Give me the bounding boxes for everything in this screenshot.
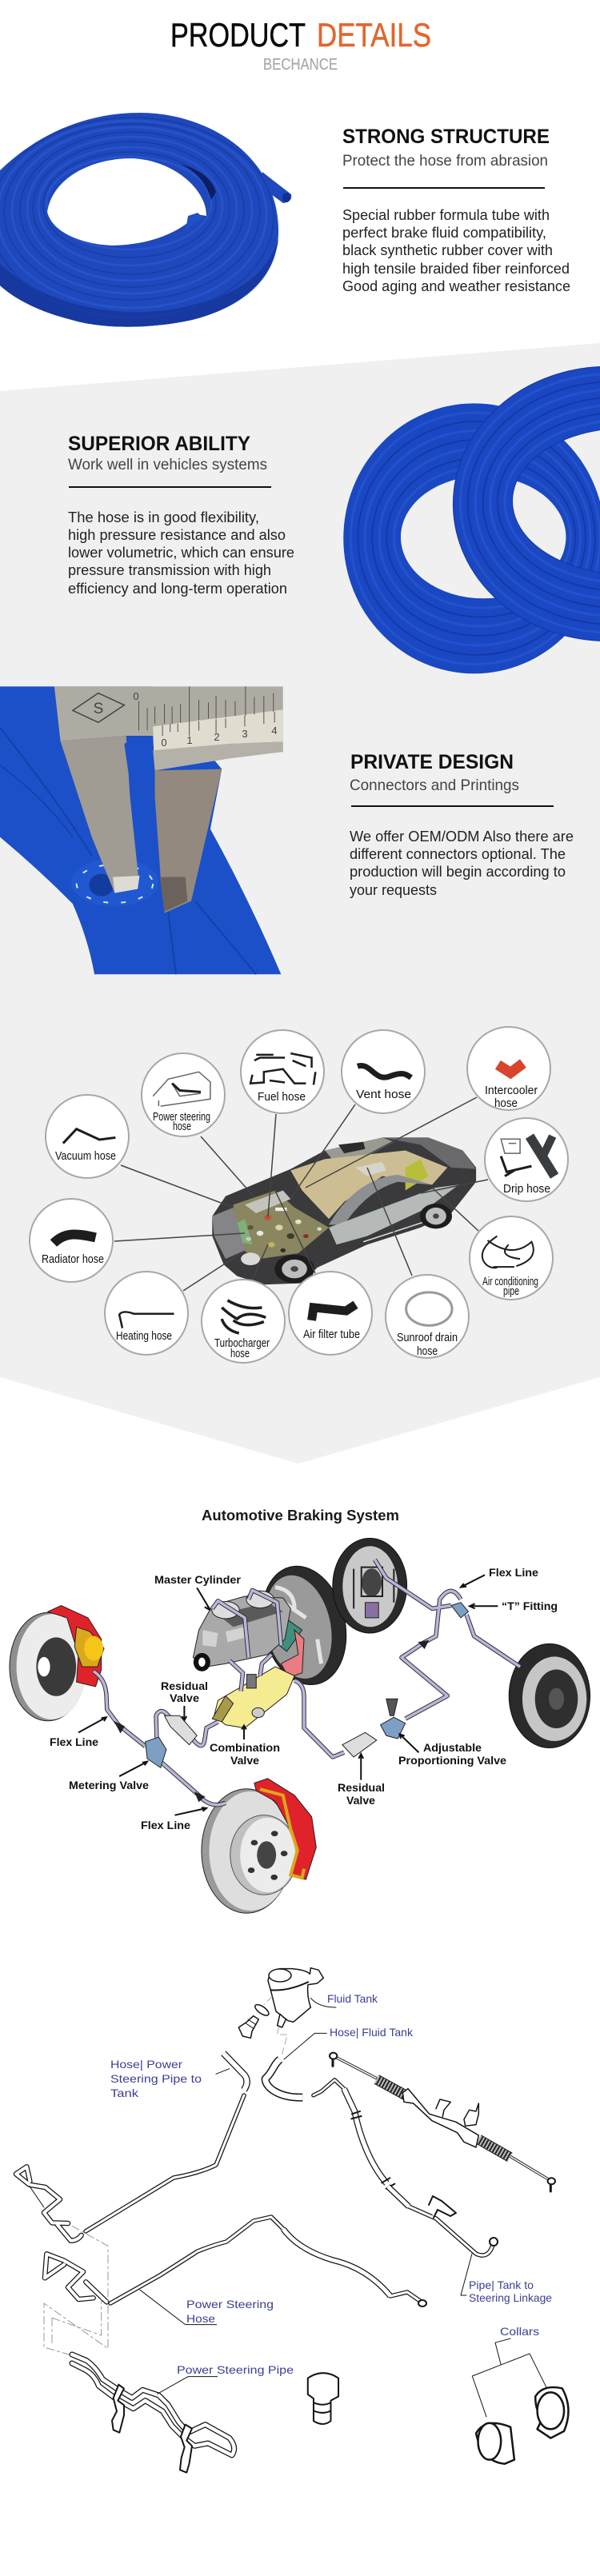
- hose labels: Turbocharger: [214, 1336, 270, 1350]
- hose labels: Vent hose: [356, 1088, 411, 1101]
- brake labels: Residual: [338, 1781, 385, 1794]
- body text: The hose is in good flexibility,: [68, 509, 259, 525]
- upper parts: tank, hoses, rack: [216, 1968, 555, 2191]
- steering labels: Tank: [110, 2087, 139, 2099]
- title: PRODUCT: [170, 16, 306, 54]
- hose labels: Drip hose: [503, 1182, 550, 1196]
- tank hose: [266, 2059, 302, 2098]
- steering labels: Hose| Power: [110, 2058, 182, 2071]
- caliper scale digits: 0: [161, 737, 167, 749]
- steering labels: Steering Pipe to: [110, 2072, 202, 2085]
- panel: strong structure: [0, 113, 570, 327]
- panel: private design: [0, 686, 574, 974]
- brake pipes fill: [94, 1560, 520, 1805]
- hose labels: Fuel hose: [258, 1090, 306, 1104]
- caliper scale digits: 3: [242, 728, 248, 740]
- leader lines: [216, 1998, 336, 2074]
- steering labels: Power Steering: [186, 2298, 274, 2310]
- pressure hose: [314, 2080, 344, 2095]
- steering labels: Steering Linkage: [469, 2291, 552, 2304]
- heading: PRIVATE DESIGN: [350, 751, 514, 773]
- long pipes: [86, 2095, 498, 2306]
- steering labels: Fluid Tank: [327, 1992, 378, 2005]
- caliper scale digits: 0: [133, 690, 139, 702]
- steering labels: [110, 1992, 552, 2376]
- hose labels: hose: [230, 1347, 250, 1360]
- brake labels: Adjustable: [423, 1741, 482, 1754]
- dashed guides: [44, 2226, 108, 2359]
- brake labels: Valve: [170, 1691, 199, 1704]
- fluid tank: [238, 1968, 323, 2038]
- hose labels: Air filter tube: [303, 1328, 360, 1341]
- heading: SUPERIOR ABILITY: [68, 433, 250, 455]
- double hose coil photo: [343, 366, 600, 673]
- top right drum: [333, 1538, 407, 1633]
- brake labels: Flex Line: [489, 1566, 538, 1579]
- brake labels: Flex Line: [141, 1819, 190, 1831]
- steering rack: [334, 2056, 551, 2181]
- steering labels: Collars: [500, 2325, 539, 2338]
- body text: production will begin according to: [350, 864, 566, 880]
- body text: efficiency and long-term operation: [68, 581, 287, 597]
- body text: different connectors optional. The: [350, 846, 566, 862]
- brake labels: Valve: [230, 1754, 259, 1767]
- body text: [68, 509, 294, 597]
- brake pipes outline: [94, 1560, 520, 1805]
- body text: perfect brake fluid compatibility,: [342, 225, 546, 241]
- title: DETAILS: [317, 16, 431, 54]
- subheading: Work well in vehicles systems: [68, 456, 267, 473]
- valves and fittings: [114, 1603, 469, 1801]
- brake labels: Flex Line: [50, 1735, 98, 1748]
- hose labels: Air conditioning: [482, 1275, 538, 1288]
- combination valve: [212, 1667, 294, 1728]
- hose labels: [42, 1084, 550, 1360]
- body text: [342, 207, 570, 294]
- body text: black synthetic rubber cover with: [342, 242, 553, 258]
- hose labels: Radiator hose: [42, 1252, 104, 1266]
- brake labels: Valve: [346, 1794, 375, 1807]
- power steering pipe assembly: [72, 2354, 234, 2473]
- brake labels: Combination: [210, 1741, 280, 1754]
- brake labels: Residual: [161, 1679, 208, 1692]
- subheading: Protect the hose from abrasion: [342, 152, 548, 170]
- caliper scale digits: S: [94, 701, 103, 717]
- panel: automotive braking system: [10, 1508, 590, 1913]
- body text: Special rubber formula tube with: [342, 207, 550, 223]
- caliper scale digits: 1: [186, 734, 193, 746]
- caliper photo: [0, 686, 283, 974]
- hose labels: hose: [494, 1096, 518, 1110]
- brake diagram: [10, 1538, 590, 1913]
- bottom disc: [202, 1779, 316, 1913]
- body text: high tensile braided fiber reinforced: [342, 261, 570, 277]
- body text: high pressure resistance and also: [68, 527, 286, 543]
- steering labels: Hose: [186, 2312, 215, 2325]
- subheading: Connectors and Printings: [350, 777, 519, 794]
- hose labels: pipe: [503, 1284, 519, 1298]
- hose end ring: [71, 858, 158, 906]
- brake labels: Master Cylinder: [154, 1573, 242, 1586]
- leader line: [140, 2290, 217, 2325]
- caliper scale digits: [94, 690, 278, 749]
- hose circles: [30, 1027, 568, 1363]
- brake labels: Proportioning Valve: [398, 1754, 506, 1767]
- chart title: Automotive Braking System: [202, 1508, 399, 1524]
- engine bay details: [246, 1208, 322, 1252]
- hose labels: hose: [173, 1120, 191, 1133]
- body text: your requests: [350, 882, 437, 898]
- brake labels: Metering Valve: [69, 1779, 149, 1791]
- left triangle pipes: [16, 2167, 217, 2359]
- brake labels: “T” Fitting: [502, 1600, 558, 1612]
- body text: lower volumetric, which can ensure: [68, 545, 294, 561]
- hose labels: Intercooler: [485, 1084, 538, 1097]
- hose labels: Heating hose: [116, 1329, 172, 1343]
- bolt and collars: [308, 2338, 568, 2464]
- hose labels: Sunroof drain: [397, 1331, 458, 1344]
- collar leader lines: [472, 2338, 547, 2417]
- car illustration: [212, 1137, 476, 1284]
- hose labels: Power steering: [153, 1110, 210, 1124]
- right drum: [509, 1643, 590, 1747]
- grey background band: [0, 343, 600, 1464]
- panel: car hose applications: [30, 1027, 568, 1363]
- hose labels: hose: [417, 1344, 438, 1358]
- steering labels: Power Steering Pipe: [177, 2363, 294, 2376]
- brake labels: [50, 1566, 558, 1831]
- body text: Good aging and weather resistance: [342, 278, 570, 294]
- panel: superior ability: [68, 366, 600, 673]
- collars: [476, 2387, 568, 2464]
- booster: [253, 1562, 355, 1689]
- hose labels: Vacuum hose: [55, 1149, 116, 1163]
- arrows: [78, 1575, 498, 1815]
- body text: pressure transmission with high: [68, 562, 271, 578]
- hose coil photo: [0, 113, 291, 327]
- body text: We offer OEM/ODM Also there are: [350, 829, 574, 845]
- steering labels: Pipe| Tank to: [469, 2278, 534, 2291]
- hose icons: [54, 1053, 554, 1333]
- master cylinder: [193, 1591, 290, 1671]
- body text: [350, 829, 574, 898]
- title: BECHANCE: [263, 56, 338, 74]
- panel: power steering diagram: [16, 1968, 568, 2473]
- return hose: [223, 2053, 247, 2090]
- connector lines: [114, 1097, 488, 1291]
- caliper scale digits: 4: [271, 725, 278, 737]
- bolt: [308, 2373, 338, 2424]
- left disc: [10, 1606, 104, 1721]
- heading: STRONG STRUCTURE: [342, 126, 550, 148]
- steering labels: Hose| Fluid Tank: [330, 2026, 414, 2039]
- title: [170, 16, 431, 74]
- caliper scale digits: 2: [214, 731, 220, 743]
